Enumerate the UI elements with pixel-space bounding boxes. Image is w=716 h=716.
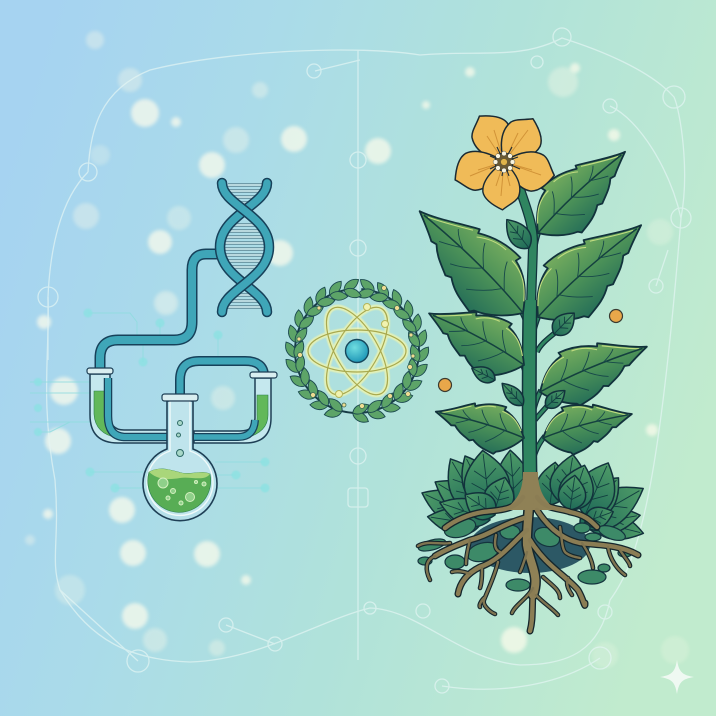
atom orbits xyxy=(308,298,406,404)
small leaves xyxy=(469,213,581,412)
lab apparatus xyxy=(87,183,277,521)
right test tube xyxy=(194,372,277,443)
connector tube from DNA to left test tube xyxy=(100,254,220,370)
flower xyxy=(448,106,559,211)
round flask xyxy=(143,394,217,521)
nucleus xyxy=(346,340,368,362)
left test tube xyxy=(87,368,168,443)
electrons xyxy=(336,304,388,398)
sparkle star xyxy=(660,660,694,694)
DNA double helix xyxy=(220,183,269,312)
cyan circuit nodes around lab apparatus xyxy=(30,308,270,492)
roots xyxy=(418,472,638,631)
atom in leafy wreath xyxy=(282,275,433,426)
plant xyxy=(392,106,665,631)
wreath xyxy=(282,275,433,426)
connector tube from flask to right test tube xyxy=(180,361,264,395)
stem xyxy=(518,183,533,480)
pollen dots xyxy=(438,310,622,392)
lower foliage and root ball xyxy=(415,448,652,591)
main leaves xyxy=(392,131,665,460)
leaf stalks xyxy=(521,231,556,462)
flower centre xyxy=(493,151,515,173)
